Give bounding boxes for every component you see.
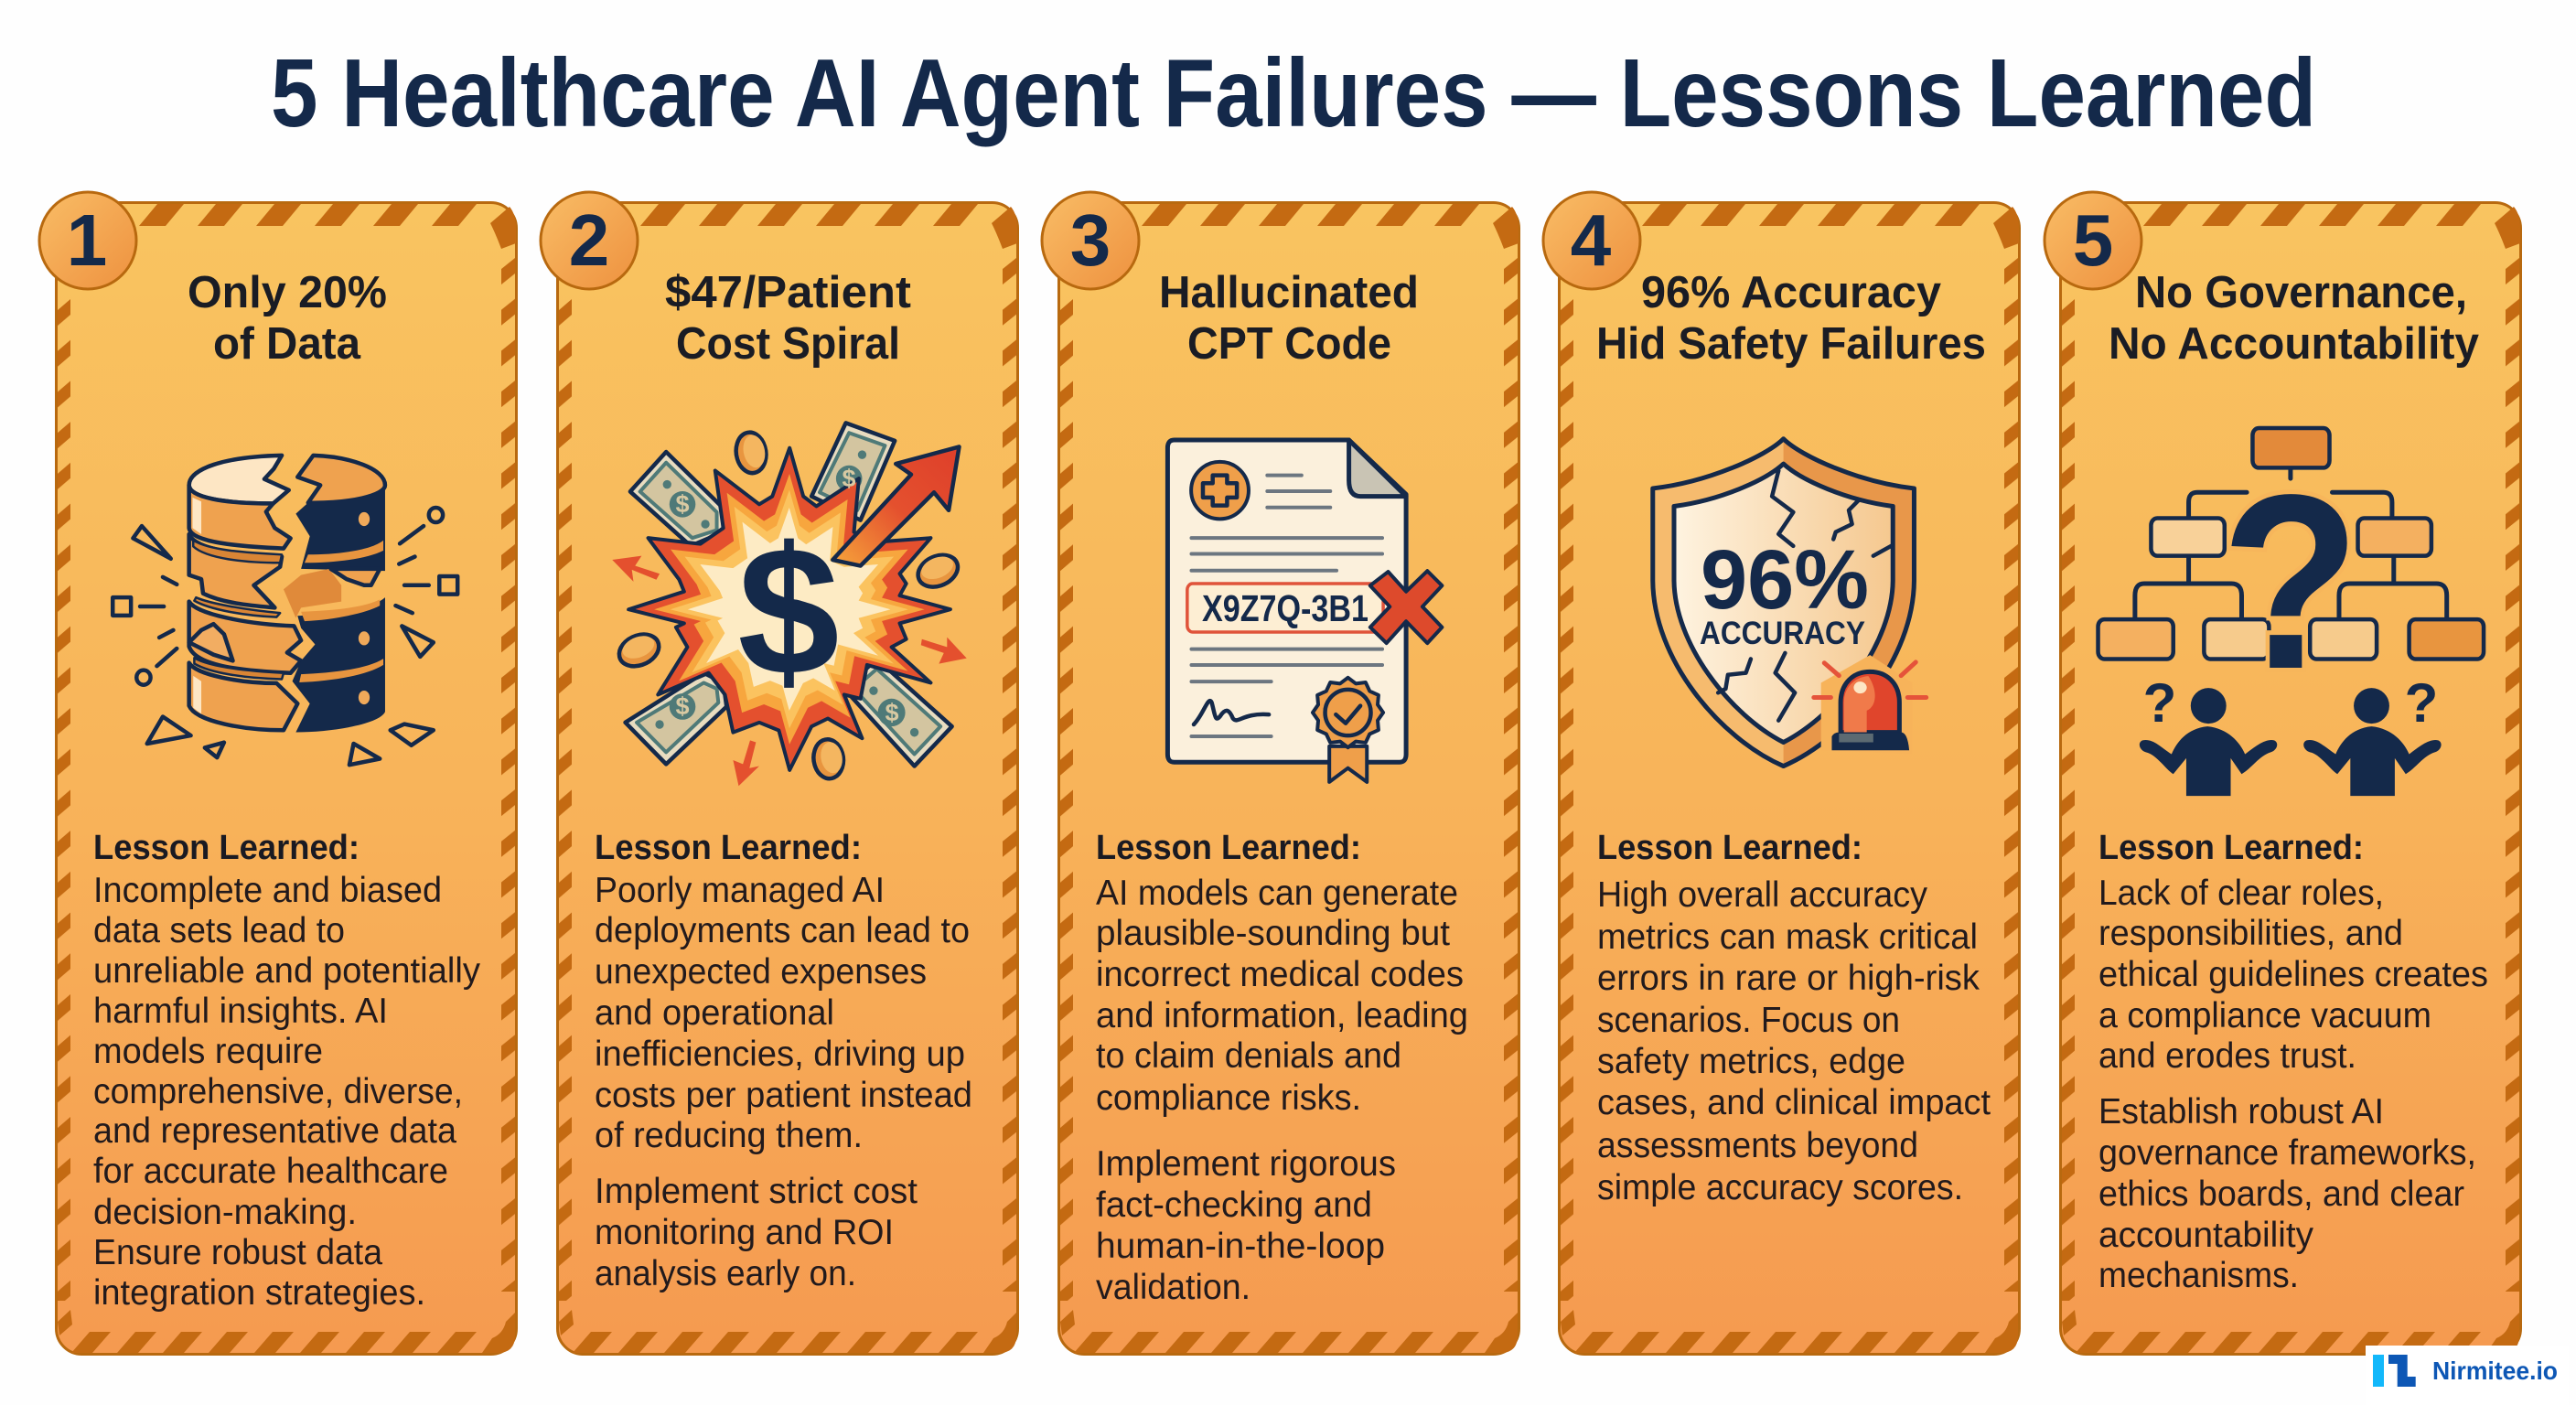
heading 5 [2109, 268, 2479, 369]
icon: org chart with question mark [2098, 428, 2484, 796]
lesson text 5: a compliance vacuum [2098, 996, 2431, 1035]
icon: org chart with question mark: ? [2221, 443, 2360, 721]
lesson text 3: incorrect medical codes [1096, 955, 1464, 994]
heading 4: Hid Safety Failures [1596, 319, 1986, 369]
lesson text 4: assessments beyond [1597, 1126, 1918, 1165]
icon: money explosion: $ [737, 509, 840, 713]
lesson text 1: unreliable and potentially [93, 951, 480, 991]
lesson text 4: cases, and clinical impact [1597, 1083, 1991, 1122]
title: 5 Healthcare AI Agent Failures — Lessons Learned [271, 39, 2316, 147]
icon: cracked shield with alarm: 96% [1701, 533, 1869, 627]
heading 5: No Governance, [2135, 268, 2467, 317]
lesson text 4: safety metrics, edge [1597, 1042, 1905, 1081]
number badge 3: 3 [1070, 199, 1111, 281]
lesson text 5: governance frameworks, [2098, 1133, 2476, 1173]
lesson text 5: Establish robust AI [2098, 1092, 2384, 1132]
icon: cracked shield with alarm: ACCURACY [1700, 616, 1865, 651]
lesson text 1: models require [93, 1032, 323, 1071]
lesson text 3: to claim denials and [1096, 1036, 1401, 1076]
number badge 5 [2045, 192, 2141, 289]
lesson text 3: human-in-the-loop [1096, 1227, 1385, 1266]
number badge 1 [39, 192, 136, 289]
lesson text 2: and operational [595, 993, 834, 1033]
lesson text 3: validation. [1096, 1268, 1250, 1307]
number badge 4: 4 [1571, 199, 1612, 281]
number badge 1: 1 [67, 199, 107, 281]
lesson text 2: Poorly managed AI [595, 871, 885, 910]
lesson text 5: mechanisms. [2098, 1256, 2299, 1295]
number badge 2: 2 [569, 199, 609, 281]
lesson text 1: decision-making. [93, 1193, 357, 1232]
lesson text 3: AI models can generate [1096, 874, 1458, 913]
heading 1: Only 20% [188, 268, 387, 317]
lesson text 3: fact-checking and [1096, 1185, 1372, 1225]
lesson text 3: compliance risks. [1096, 1078, 1361, 1118]
lesson text 2 [595, 829, 972, 1293]
panel: failure 3 hallucinated code [1042, 192, 1519, 1354]
panel: failure 5 no governance [2045, 192, 2521, 1354]
icon: medical document with wrong code [1167, 440, 1442, 782]
lesson text 5: accountability [2098, 1216, 2313, 1255]
lesson text 2: Implement strict cost [595, 1172, 918, 1211]
lesson text 2: unexpected expenses [595, 952, 927, 992]
lesson text 1: harmful insights. AI [93, 992, 388, 1031]
number badge 3 [1042, 192, 1139, 289]
lesson text 1: comprehensive, diverse, [93, 1072, 463, 1111]
icon: money explosion: $ [675, 490, 690, 518]
logo: Nirmitee.io [2366, 1346, 2569, 1405]
lesson text 2: costs per patient instead [595, 1076, 972, 1115]
lesson text 4 [1597, 829, 1991, 1207]
lesson text 3: and information, leading [1096, 996, 1468, 1035]
panel: failure 1 only 20% of data [39, 192, 516, 1354]
lesson text 1: and representative data [93, 1111, 456, 1151]
lesson text 2: of reducing them. [595, 1116, 863, 1155]
lesson text 1 [93, 829, 480, 1313]
lesson text 4: errors in rare or high-risk [1597, 959, 1980, 998]
lesson text 5: responsibilities, and [2098, 914, 2403, 953]
icon: money explosion: $ [885, 699, 899, 726]
heading 3 [1159, 268, 1419, 369]
lesson text 5: and erodes trust. [2098, 1036, 2356, 1076]
lesson text 1: for accurate healthcare [93, 1152, 448, 1191]
heading 4: 96% Accuracy [1641, 268, 1941, 317]
lesson text 3: plausible-sounding but [1096, 914, 1450, 953]
lesson text 5: ethical guidelines creates [2098, 955, 2488, 994]
lesson text 2: inefficiencies, driving up [595, 1035, 965, 1074]
heading 4 [1596, 268, 1986, 369]
heading 2: Cost Spiral [676, 319, 900, 369]
heading 1: of Data [213, 319, 361, 369]
panel: failure 4 accuracy hid safety failures [1543, 192, 2020, 1354]
lesson text 2: analysis early on. [595, 1254, 856, 1293]
lesson text 1: Ensure robust data [93, 1233, 382, 1272]
lesson text 2: deployments can lead to [595, 911, 970, 950]
heading 1 [188, 268, 387, 369]
icon: org chart with question mark: ? [2143, 672, 2176, 734]
heading 3: CPT Code [1187, 319, 1391, 369]
icon: money explosion: $ [842, 465, 856, 492]
lesson text 4: High overall accuracy [1597, 875, 1927, 915]
lesson text 4: metrics can mask critical [1597, 917, 1978, 957]
icon: org chart with question mark: ? [2405, 672, 2438, 734]
heading 2: $47/Patient [665, 268, 911, 317]
icon: money explosion [612, 423, 967, 786]
lesson text 1: Lesson Learned: [93, 829, 360, 867]
lesson text 4: scenarios. Focus on [1597, 1001, 1900, 1040]
lesson text 4: simple accuracy scores. [1597, 1168, 1963, 1207]
heading 2 [665, 268, 911, 369]
icon: cracked shield with alarm [1653, 439, 1927, 767]
lesson text 5: Lesson Learned: [2098, 829, 2364, 867]
icon: broken database [113, 456, 457, 765]
lesson text 5: Lack of clear roles, [2098, 874, 2384, 913]
lesson text 4: Lesson Learned: [1597, 829, 1862, 867]
lesson text 2: Lesson Learned: [595, 829, 862, 867]
number badge 4 [1543, 192, 1640, 289]
heading 3: Hallucinated [1159, 268, 1419, 317]
number badge 2 [541, 192, 638, 289]
logo: Nirmitee.io: Nirmitee.io [2432, 1357, 2558, 1385]
lesson text 1: Incomplete and biased [93, 871, 442, 910]
lesson text 3: Implement rigorous [1096, 1144, 1396, 1184]
lesson text 1: integration strategies. [93, 1273, 425, 1313]
lesson text 5 [2098, 829, 2488, 1295]
lesson text 3: Lesson Learned: [1096, 829, 1361, 867]
icon: money explosion: $ [675, 692, 690, 720]
lesson text 1: data sets lead to [93, 911, 345, 950]
panel: failure 2 cost spiral [541, 192, 1017, 1354]
heading 5: No Accountability [2109, 319, 2479, 369]
lesson text 5: ethics boards, and clear [2098, 1174, 2464, 1214]
lesson text 3 [1096, 829, 1468, 1307]
lesson text 2: monitoring and ROI [595, 1213, 894, 1252]
number badge 5: 5 [2073, 199, 2113, 281]
icon: medical document with wrong code: X9Z7Q-3B1 [1202, 587, 1368, 629]
